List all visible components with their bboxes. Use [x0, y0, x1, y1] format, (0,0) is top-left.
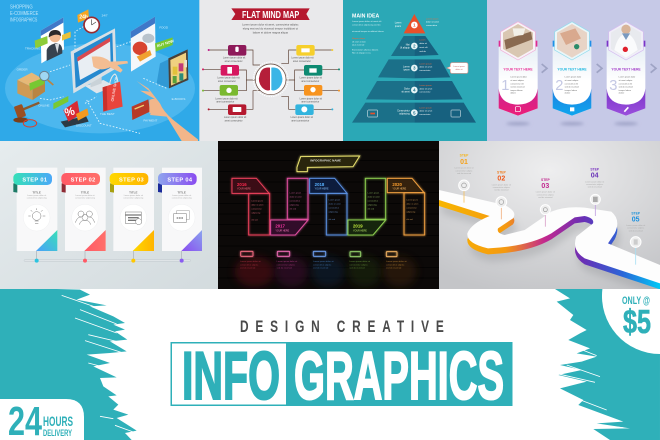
panel: pyramid infographic: [343, 0, 487, 141]
step 03 card: STEP 03: [119, 177, 144, 183]
card 2: consectetur elit: [565, 82, 579, 85]
callout: [447, 63, 468, 73]
level notes: Lorem ipsum: [419, 106, 432, 109]
heading: shopping e-commerce: SHOPPING: [10, 4, 33, 10]
pyramid level 4: Dolor: [404, 87, 410, 90]
legend text: consectetur adipisc: [277, 263, 296, 266]
block notes: dolor sit amet: [251, 204, 264, 207]
step 01 card: consectetur adipiscing: [27, 197, 47, 200]
step 03 marker: Lorem ipsum dolor sit: [536, 191, 555, 194]
brush stroke left: [0, 289, 137, 440]
card 1: dolore: [510, 92, 517, 94]
legend text: consectetur adipisc: [240, 263, 259, 266]
step 01 card: TITLE: [32, 190, 41, 194]
delivery badge: [0, 398, 84, 440]
callout: Lorem ipsum: [453, 66, 465, 68]
node captions: amet consectetur: [225, 60, 243, 63]
step 03 card: Lorem ipsum dolor sit: [124, 194, 143, 197]
card 1: 1: [501, 78, 509, 94]
icon: hand with credit card: [132, 81, 200, 141]
legend text: consectetur adipisc: [313, 263, 332, 266]
block notes: Lorem ipsum: [406, 200, 418, 202]
card 2: [553, 22, 591, 125]
block notes: dolor sit amet: [368, 195, 380, 198]
step 04 marker: 04: [591, 172, 599, 179]
icon: shopping bag: ONLINE SHOP: [110, 76, 119, 102]
card 1: sit amet adipisc: [510, 79, 524, 82]
callout: dolor sit: [455, 68, 463, 71]
pyramid level 5: [352, 103, 476, 123]
level notes: Lorem ipsum: [419, 84, 432, 87]
pyramid level 1: ipsum: [395, 26, 401, 28]
neon 2016 block: [232, 178, 270, 235]
icon: discount tag: [53, 96, 89, 127]
node captions: Lorem ipsum dolor sit: [217, 77, 240, 80]
node markers: [202, 49, 340, 110]
neon 2020 block: [387, 178, 425, 235]
step 03 card: TITLE: [129, 190, 138, 194]
level notes: dolor sit: [419, 42, 427, 45]
card 3: YOUR TEXT HERE: [611, 68, 641, 72]
intro text: Nisi ut aliquip ex ea: [352, 52, 371, 55]
level notes: sed do: [419, 51, 427, 53]
neon 2019 block: [348, 178, 386, 235]
heading: design creative: DESIGN CREATIVE: [240, 318, 444, 337]
intro text: [242, 23, 299, 34]
level notes: dolor sit amet: [426, 21, 439, 24]
card 1: Lorem ipsum dolor: [510, 77, 527, 79]
neon 2017 block: [271, 178, 308, 235]
block notes: Lorem ipsum: [368, 192, 380, 194]
step 04 marker: consectetur adipisc: [586, 183, 603, 186]
node captions: Lorem ipsum dolor sit: [224, 116, 247, 119]
small captions: E-BOOKS: [172, 97, 185, 101]
step 03 marker: [536, 178, 555, 227]
winding road: [439, 190, 660, 289]
step 01 marker: sed do eiusmod: [457, 173, 471, 175]
icon: shopping basket card: [131, 17, 175, 72]
card 2: sed do eiusmod: [565, 87, 579, 89]
icon: support agent card: [35, 17, 71, 63]
step 01 marker: consectetur adipisc: [455, 169, 473, 172]
intro text: [352, 20, 385, 55]
mind map nodes: [220, 45, 322, 115]
legend text: sed do eiusmod: [277, 268, 293, 270]
pyramid level 2: Nisi: [406, 44, 410, 46]
level notes: Lorem: [419, 39, 426, 42]
panel: winding road roadmap: [439, 141, 660, 289]
block notes: adipiscing: [251, 213, 260, 215]
step 03 marker: sed do eiusmod: [538, 197, 552, 199]
card 3: Lorem ipsum dolor: [619, 77, 636, 79]
legend text: sed do eiusmod: [386, 268, 402, 270]
neon 2018 block: YOUR HERE: [315, 189, 329, 191]
pyramid level 3: [378, 59, 450, 78]
neon 2017 block: 2017: [275, 224, 286, 229]
level notes: Lorem ipsum: [426, 17, 439, 20]
level notes: dolor sit amet: [419, 87, 433, 90]
panel: neon timeline: [218, 141, 439, 289]
small captions: 24/7: [102, 14, 108, 18]
block notes: elit sed: [406, 218, 413, 221]
intro text: Quis nostrud: [352, 44, 365, 47]
step 02 marker: 02: [497, 176, 505, 183]
heading: infographics logo: [170, 338, 512, 414]
small captions: [17, 14, 185, 128]
step 03 card: consectetur adipiscing: [123, 197, 143, 200]
legend text: [240, 260, 407, 270]
step 03 card: [110, 168, 154, 251]
neon title plate: [297, 156, 360, 172]
card 2: sit amet adipisc: [565, 79, 578, 82]
level notes: dolor sit amet: [419, 110, 433, 113]
card 2: tempor labore: [565, 89, 578, 92]
step 01 marker: 01: [460, 159, 468, 166]
step 05 marker: STEP: [631, 212, 641, 216]
legend text: consectetur adipisc: [386, 263, 405, 266]
block notes: adipiscing: [406, 212, 415, 214]
level notes: [419, 17, 439, 116]
card 2: dolore: [565, 92, 571, 94]
level notes: consectetur: [419, 69, 431, 72]
step 02 marker: STEP: [497, 171, 506, 175]
node captions: amet consectetur: [301, 80, 319, 83]
step 05 marker: [626, 212, 646, 265]
neon 2019 block: YOUR HERE: [353, 230, 367, 232]
heading banner: [231, 8, 310, 21]
level notes: consectetur: [419, 91, 431, 94]
card 3: sit amet adipisc: [619, 79, 632, 82]
node captions: [215, 57, 322, 122]
step 03 marker: consectetur adipisc: [537, 193, 554, 196]
pyramid level 2: 2: [413, 44, 416, 49]
icon: gavel: [13, 103, 39, 127]
step 02 marker: consectetur adipisc: [493, 186, 510, 189]
icon: discount tag: %: [63, 105, 76, 120]
step 04 marker: [585, 168, 605, 216]
panel: three step cards: [487, 0, 660, 141]
pyramid level 5: 5: [413, 110, 416, 115]
panel: flat mind map: [198, 0, 343, 141]
block notes: consectetur: [251, 208, 262, 211]
node captions: amet consectetur: [301, 101, 319, 104]
intro text: Exercitation ullamco laboris: [352, 49, 378, 52]
block notes: consectetur: [329, 207, 339, 210]
block notes: consectetur: [368, 199, 378, 202]
neon 2020 block: 2020: [392, 182, 403, 187]
delivery badge: HOURS: [43, 413, 73, 429]
step 02 card: STEP 02: [71, 177, 95, 183]
small captions: ONLINE: [38, 104, 50, 108]
node captions: Lorem ipsum dolor sit: [223, 57, 246, 60]
neon 2016 block: YOUR HERE: [237, 189, 251, 191]
neon legend boxes: [241, 251, 397, 257]
icon: book shelf: [157, 49, 188, 88]
step 04 card: STEP 04: [167, 177, 193, 183]
card 1: sed do eiusmod: [510, 87, 524, 89]
pyramid level 4: 4: [413, 88, 416, 93]
step 05 marker: consectetur adipisc: [627, 227, 644, 230]
legend text: sed do eiusmod: [349, 268, 365, 270]
block notes: dolor sit amet: [406, 203, 419, 206]
node captions: amet consectetur: [291, 119, 309, 122]
neon 2018 block: 2018: [315, 182, 325, 187]
step 03 marker: 03: [541, 183, 549, 190]
node captions: amet consectetur: [293, 60, 311, 63]
legend text: sed do eiusmod: [240, 268, 256, 270]
neon title plate: INFOGRAPHIC NAME: [310, 159, 341, 163]
level notes: consectetur: [426, 24, 437, 27]
node captions: amet consectetur: [216, 101, 234, 104]
step 02 marker: [492, 171, 511, 219]
icon: 24h clock: [77, 9, 99, 33]
pyramid level 5: Consectetur: [397, 109, 410, 112]
step 02 card: TITLE: [81, 190, 89, 194]
block notes: adipiscing: [368, 204, 377, 206]
step 02 card: consectetur adipiscing: [75, 197, 95, 200]
legend text: consectetur adipisc: [349, 263, 369, 266]
level notes: amet elit: [419, 46, 428, 49]
block notes: elit sed: [290, 207, 296, 210]
heading: shopping e-commerce: [10, 4, 39, 24]
node captions: Lorem ipsum dolor sit: [291, 57, 314, 60]
small captions: TRACKING: [25, 46, 41, 50]
intro text: consectetur adipiscing sed do: [352, 23, 381, 26]
card 2: Lorem ipsum dolor: [565, 77, 582, 79]
chevron 1: [542, 64, 547, 73]
icon: 24h clock: 24h: [79, 14, 88, 20]
step 01 marker: STEP: [460, 154, 469, 158]
card 3: consectetur elit: [619, 82, 633, 85]
legend text: Lorem ipsum dolor sit: [313, 260, 334, 263]
price badge: $5: [623, 303, 651, 340]
small captions: ORDER: [17, 68, 28, 72]
card 1: tempor labore: [510, 89, 524, 92]
pyramid level 5: adipiscing: [399, 114, 410, 116]
step 01 card: [13, 168, 57, 251]
icon: parcel box: [17, 71, 53, 100]
small captions: DISCOUNT: [76, 124, 92, 128]
level notes: Lorem ipsum: [419, 62, 432, 65]
small captions: PAYMENT: [143, 119, 158, 123]
card 1: consectetur elit: [510, 82, 524, 85]
block notes: Lorem ipsum: [329, 200, 341, 202]
block notes: consectetur: [406, 207, 417, 210]
heading: shopping e-commerce: INFOGRAPHICS: [10, 18, 38, 24]
legend text: Lorem ipsum dolor sit: [349, 260, 370, 263]
block notes: Lorem ipsum: [290, 192, 302, 194]
pyramid level 1: Lorem: [395, 22, 401, 25]
block notes: consectetur: [290, 199, 300, 202]
step 04 card: TITLE: [177, 190, 186, 194]
card 2: 2: [555, 78, 563, 94]
step 04 card: [158, 168, 202, 251]
card 3: dolore: [619, 92, 625, 94]
heading banner: FLAT MIND MAP: [242, 10, 300, 21]
block notes: dolor sit amet: [290, 195, 302, 198]
heading: infographics logo: GRAPHICS: [294, 338, 504, 414]
chevron 3: [651, 64, 656, 73]
intro text: eiusmod tempor incididunt labore: [352, 30, 385, 33]
neon 2019 block: 2019: [353, 224, 363, 229]
step 05 marker: Lorem ipsum dolor sit: [626, 224, 646, 227]
step 03 marker: STEP: [541, 178, 550, 182]
card 3: tempor labore: [619, 89, 632, 92]
intro text: Magna aliqua: [352, 38, 366, 40]
step 01 card: Lorem ipsum dolor sit: [27, 194, 47, 197]
block notes: dolor sit amet: [329, 203, 341, 206]
node captions: amet consectetur: [225, 119, 243, 122]
block notes: elit sed: [251, 218, 258, 221]
step 02 card: Lorem ipsum dolor sit: [75, 194, 95, 197]
pyramid level 3: Lorem: [403, 65, 410, 68]
icon: computer monitor with hand: [71, 28, 128, 93]
node captions: Lorem ipsum dolor sit: [300, 97, 322, 100]
heading: main idea: MAIN IDEA: [352, 14, 380, 20]
legend text: Lorem ipsum dolor sit: [386, 260, 407, 263]
node captions: Lorem ipsum dolor sit: [300, 77, 322, 80]
delivery badge: DELIVERY: [43, 428, 72, 439]
block notes: Lorem ipsum: [251, 201, 263, 203]
pyramid level 3: 3: [413, 66, 416, 71]
card 3: 3: [609, 78, 617, 94]
intro text: Ut enim minim: [352, 40, 366, 43]
step 05 marker: 05: [632, 216, 640, 223]
step 01 card: STEP 01: [22, 177, 47, 183]
legend text: Lorem ipsum dolor sit: [240, 260, 261, 263]
node captions: amet consectetur: [218, 80, 236, 83]
small captions: FOOD: [159, 25, 169, 29]
card 1: YOUR TEXT HERE: [503, 68, 533, 72]
timeline: [24, 251, 191, 263]
legend text: Lorem ipsum dolor sit: [277, 260, 298, 263]
block notes: elit sed: [368, 207, 374, 210]
neon 2018 block: [310, 178, 347, 235]
step 04 marker: sed do eiusmod: [588, 187, 602, 189]
heading: infographics logo: INFO: [182, 338, 280, 414]
heading: shopping e-commerce: E-COMMERCE: [10, 11, 39, 17]
brush stroke right: [555, 289, 660, 440]
intro text: elong erat sed do eiusmod tempor incididunt ut: [243, 26, 298, 30]
step 04 marker: Lorem ipsum dolor sit: [585, 180, 605, 183]
step 04 marker: STEP: [590, 168, 600, 172]
card 3: sed do eiusmod: [619, 87, 633, 89]
step 05 marker: sed do eiusmod: [629, 230, 643, 232]
banner: bottom white section: [0, 289, 660, 440]
neon 2020 block: YOUR HERE: [392, 189, 407, 191]
level notes: dolor sit amet: [419, 66, 433, 69]
node captions: Lorem ipsum dolor sit: [215, 97, 238, 100]
card 1: [499, 22, 538, 125]
node captions: Lorem ipsum dolor sit: [291, 116, 313, 119]
card 2: YOUR TEXT HERE: [557, 68, 587, 72]
pyramid level 2: Ut aliquip: [400, 47, 410, 50]
pyramid level 2: [391, 36, 439, 56]
legend text: sed do eiusmod: [313, 268, 329, 270]
connectors: [203, 50, 339, 109]
block notes: adipiscing: [329, 212, 338, 214]
pyramid level 1: 1: [413, 23, 416, 28]
step 02 marker: sed do eiusmod: [494, 190, 508, 192]
step 02 marker: Lorem ipsum dolor sit: [492, 183, 511, 186]
brain diagram: [253, 62, 288, 97]
step 01 marker: Lorem ipsum dolor sit: [454, 167, 474, 170]
block notes: adipiscing: [290, 204, 299, 206]
panel: four step cards: [0, 141, 218, 289]
small captions: THE BEST: [100, 112, 115, 116]
icon: shopping bag: [103, 74, 123, 112]
intro text: labore et dolore magna aliqua: [253, 30, 288, 34]
chevron 2: [597, 64, 602, 73]
icon: shopping basket card: BUY NOW: [156, 39, 175, 48]
panel: isometric e-commerce infographic: [0, 0, 198, 141]
pyramid level 4: sit amet: [402, 91, 410, 94]
pyramid level 4: [366, 81, 463, 100]
block notes: [251, 192, 419, 221]
level notes: consectetur: [419, 113, 431, 116]
intro text: Lorem ipsum dolor sit amet elit: [352, 20, 382, 23]
pyramid level 3: ipsum: [403, 70, 410, 72]
card 3: [607, 22, 645, 125]
step 04 card: Lorem ipsum dolor sit: [172, 194, 192, 197]
pyramid level 1: [395, 14, 425, 33]
neon 2017 block: YOUR HERE: [275, 230, 290, 232]
neon 2016 block: 2016: [237, 182, 247, 187]
dotted connectors: [40, 27, 167, 133]
step 01 marker: [454, 154, 474, 203]
step 02 card: [61, 168, 106, 251]
step 04 card: consectetur adipiscing: [172, 197, 192, 200]
intro text: Lorem ipsum dolor sit amet, consectetur adipisc: [242, 23, 299, 27]
block notes: elit sed: [329, 218, 335, 221]
price badge: [602, 289, 660, 354]
